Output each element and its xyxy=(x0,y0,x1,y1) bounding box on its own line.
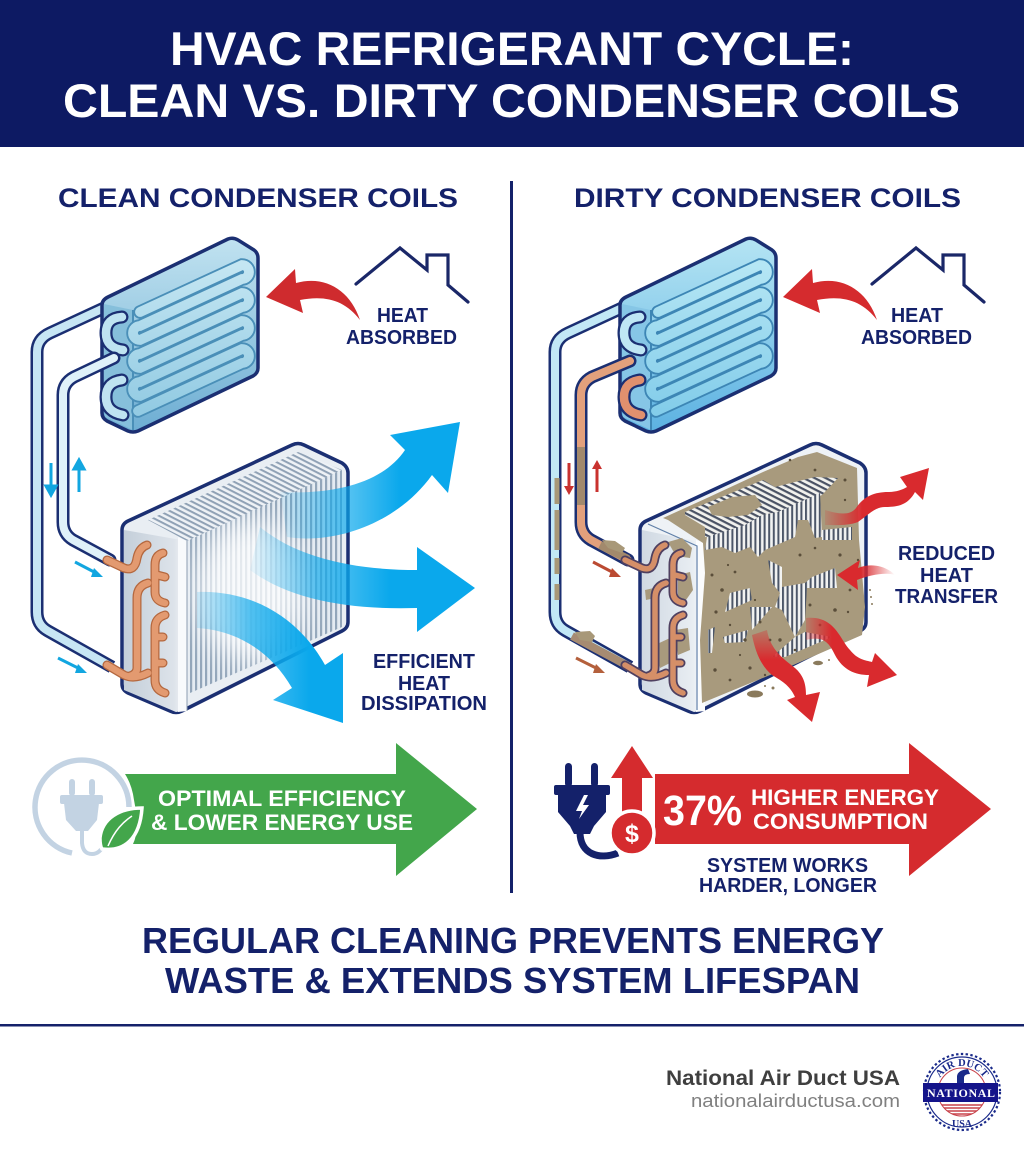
callout: optimal efficiency xyxy=(35,743,477,876)
conclusion text xyxy=(142,920,884,1001)
title: CLEAN VS. DIRTY CONDENSER COILS xyxy=(63,74,960,127)
text: system works harder: SYSTEM WORKS xyxy=(707,855,868,877)
copper tubes, dirty xyxy=(625,545,683,693)
heading: dirty condenser coils: DIRTY CONDENSER COILS xyxy=(574,183,961,213)
return bends, dirty xyxy=(624,317,641,415)
text: optimal efficiency: OPTIMAL EFFICIENCY xyxy=(158,786,406,811)
logo: national air duct: NATIONAL xyxy=(927,1086,995,1100)
icon: house xyxy=(356,248,468,302)
text: higher energy consumption xyxy=(751,785,939,834)
label: efficient heat dissipation: DISSIPATION xyxy=(361,693,487,715)
icon: plug xyxy=(554,763,618,856)
icon: house xyxy=(872,248,984,302)
label: efficient heat dissipation: EFFICIENT xyxy=(373,651,475,673)
footer brand: National Air Duct USA xyxy=(666,1066,900,1090)
dirt layer xyxy=(663,452,865,703)
green arrow xyxy=(125,743,477,876)
logo: national air duct: USA xyxy=(952,1119,973,1130)
red arrow xyxy=(655,743,991,876)
label: reduced heat transfer: TRANSFER xyxy=(895,586,999,608)
refrigerant pipe, outer dirty xyxy=(555,308,630,667)
dirt blob on top fins xyxy=(708,495,762,517)
label: heat absorbed: ABSORBED xyxy=(346,327,457,349)
footer brand: nationalairductusa.com xyxy=(691,1090,900,1111)
dirt clumps on pipes xyxy=(575,540,625,642)
label: heat absorbed: ABSORBED xyxy=(861,327,972,349)
conclusion text: WASTE & EXTENDS SYSTEM LIFESPAN xyxy=(165,960,860,1001)
flow arrows, blue xyxy=(46,460,103,673)
label: heat absorbed xyxy=(861,305,972,349)
evaporator coil, clean xyxy=(102,238,258,432)
dirt specks xyxy=(710,459,859,681)
panel: dirty system xyxy=(555,238,999,722)
label: reduced heat transfer xyxy=(895,543,999,608)
dirt on side panel xyxy=(645,538,693,668)
icon: dollar coin xyxy=(610,811,654,855)
arrow: airflow upper xyxy=(280,422,460,538)
arrow: escaping heat right xyxy=(806,618,897,687)
text: higher energy consumption: HIGHER ENERGY xyxy=(751,785,939,810)
label: heat absorbed: HEAT xyxy=(377,305,428,327)
icon: leaf xyxy=(100,808,142,849)
icon: plug ring xyxy=(35,760,129,853)
refrigerant pipe, copper dirty xyxy=(581,361,630,560)
condenser coil, dirty xyxy=(640,444,873,712)
icon: dollar coin: $ xyxy=(625,820,639,848)
panel: clean system xyxy=(37,238,487,723)
icon: plug xyxy=(60,779,104,854)
conclusion text: REGULAR CLEANING PREVENTS ENERGY xyxy=(142,920,884,961)
refrigerant pipe, outer clean xyxy=(37,308,112,667)
logo: national air duct: AIR DUCT xyxy=(936,1059,990,1078)
refrigerant pipe, inner clean xyxy=(63,358,114,560)
arrow: airflow middle xyxy=(250,527,475,632)
arrow: escaping heat down xyxy=(752,630,820,722)
arrow: escaping heat upper xyxy=(825,468,929,525)
label: reduced heat transfer: HEAT xyxy=(920,565,973,587)
label: heat absorbed: HEAT xyxy=(891,305,943,327)
condenser coil, clean xyxy=(122,444,348,712)
arrow: heat absorbed xyxy=(783,269,877,320)
exposed fins, front xyxy=(705,493,852,657)
label: efficient heat dissipation xyxy=(361,651,487,715)
title xyxy=(63,22,960,127)
evaporator coil, dirty xyxy=(620,238,776,432)
copper tubes, clean xyxy=(107,545,165,693)
return bends xyxy=(106,317,123,415)
footer brand xyxy=(666,1066,900,1111)
flow arrows, red xyxy=(564,460,621,673)
text: system works harder xyxy=(699,855,878,897)
arrow: reduced heat inflow xyxy=(837,560,895,590)
text: optimal efficiency xyxy=(151,786,413,835)
heading: clean condenser coils: CLEAN CONDENSER COILS xyxy=(58,183,458,213)
logo: national air duct xyxy=(922,1052,1002,1132)
label: heat absorbed xyxy=(346,305,457,349)
label: efficient heat dissipation: HEAT xyxy=(398,673,450,695)
header banner xyxy=(0,0,1024,147)
arrow: heat absorbed xyxy=(266,269,360,320)
text: optimal efficiency: & LOWER ENERGY USE xyxy=(151,810,413,835)
title: HVAC REFRIGERANT CYCLE: xyxy=(170,22,854,75)
text: higher energy consumption: CONSUMPTION xyxy=(753,809,928,834)
arrow: airflow lower xyxy=(197,592,343,723)
stray dirt xyxy=(747,589,873,698)
icon: rising arrow xyxy=(611,746,653,815)
exposed fins, top xyxy=(685,477,838,538)
callout: higher energy consumption xyxy=(554,743,991,897)
label: reduced heat transfer: REDUCED xyxy=(898,543,995,565)
stat: 37%: 37% xyxy=(663,787,742,835)
text: system works harder: HARDER, LONGER xyxy=(699,875,878,897)
